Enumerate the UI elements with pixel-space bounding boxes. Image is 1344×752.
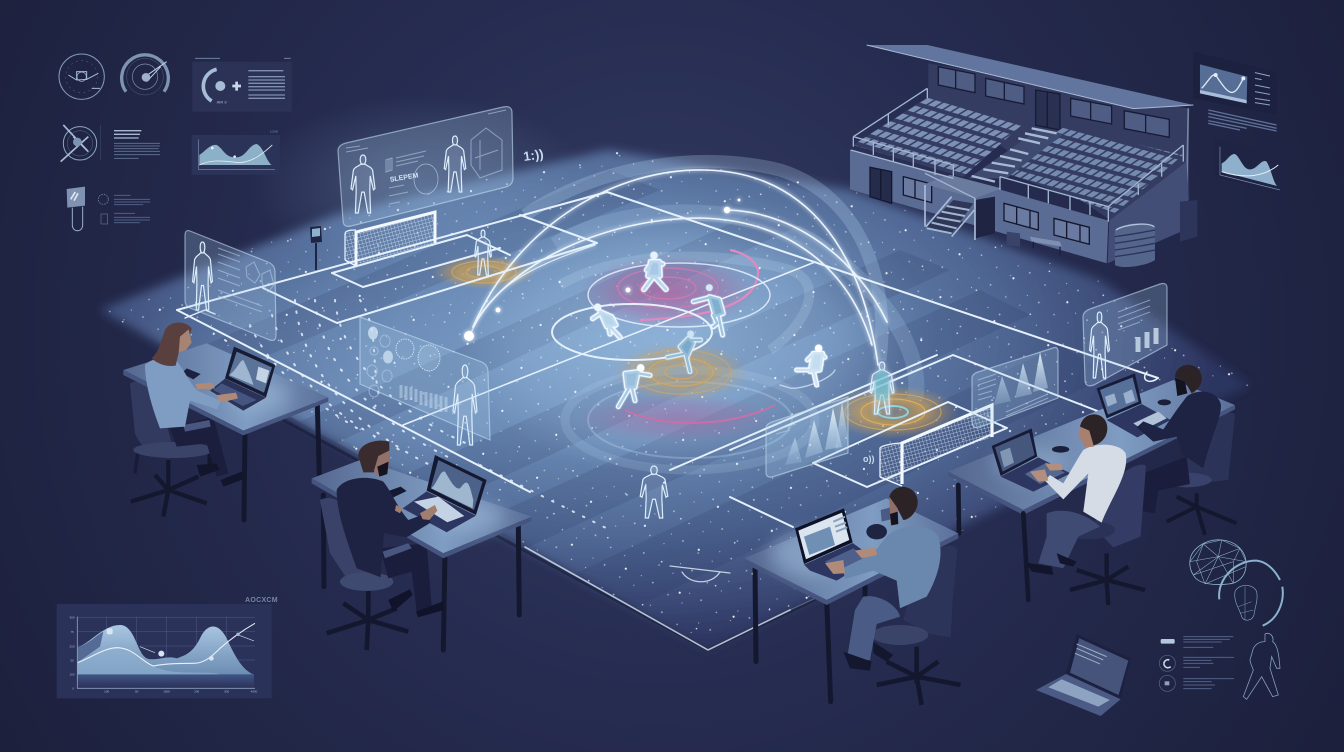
desk: analyst one [123,323,328,520]
far laptop [1097,373,1171,437]
panel: recovery dashboard card [192,58,292,112]
stand railings [851,88,1183,222]
far face [1175,377,1187,396]
player: striker [644,252,666,289]
clubhouse windows [938,67,1169,137]
camera tablet on pole [310,226,322,270]
chart axes [77,617,255,688]
middle torso [1045,445,1126,523]
woman torso [145,358,221,428]
small speaker box [881,507,895,522]
desk top [123,343,328,431]
underpass [975,197,995,238]
front laptop [795,508,874,581]
front legs [847,596,900,661]
sonar icon near goal: o)) [863,454,874,464]
holographic panel: biometric silhouette [185,231,276,340]
board readouts [346,110,506,204]
panel: anatomy wireframe [1159,540,1283,699]
man legs [380,543,432,616]
ring gauge [1219,561,1280,599]
player: sprinter [797,345,825,385]
man hair [358,441,389,472]
front chair [872,546,961,705]
chart labels: 75 [70,630,74,634]
heat zones [432,250,959,442]
middle face [1078,427,1094,447]
armrest [183,420,211,432]
panel: radar dial [59,54,104,99]
middle legs [1038,511,1100,568]
middle laptop [992,428,1071,492]
holographic panel: data clusters [360,317,490,445]
desk: analyst two [312,441,532,650]
board readouts: SLEPEM [389,172,419,184]
woman hands [195,383,238,402]
lower wall left [850,150,1108,263]
right goal [880,405,992,486]
pitch lines [177,192,1158,650]
panel: stadium chart top right [1193,52,1285,195]
bowl [866,524,887,539]
front beard [890,512,898,525]
holographic panel: load peaks [972,348,1058,428]
holographic panel: player tracking board [338,107,513,226]
central stairs [968,128,1063,178]
panel: wearable sensor legend [67,187,150,231]
chart grid [77,617,255,688]
signal icon: 1:)) [522,146,544,164]
middle hair [1080,414,1107,445]
middle hands [1030,463,1063,482]
player outline figures [475,230,668,518]
man chair [320,498,408,650]
bench and bin [1007,232,1062,255]
board figures [351,136,466,213]
woman hair [152,323,192,366]
left goal [345,212,435,266]
middle chair [1062,465,1146,605]
goalkeeper figure [870,362,894,414]
chart labels: 200 [70,644,75,648]
desk: analyst three [744,487,961,705]
far torso [1137,392,1221,468]
chart labels: 300 [224,690,229,694]
man beard [377,462,389,477]
player: midfielder tall [693,284,723,335]
far chair [1162,413,1237,535]
chart labels: 200 [194,690,199,694]
man face [374,451,389,476]
desk: analyst five far right [948,365,1237,605]
mesh skull [1235,585,1257,620]
chart labels: 0 [72,686,74,690]
chart markers [107,628,240,661]
stair treads [972,128,1057,182]
man laptop [403,455,487,532]
chart trend lines [77,623,255,666]
desk legs [210,405,319,520]
desk top [312,459,532,553]
holographic panel: squad stats [1083,284,1167,386]
ball trajectories [464,170,887,365]
far legs [1141,457,1190,513]
text strip [1208,110,1277,131]
woman legs [170,417,228,477]
seating bank left [853,97,1023,177]
desk legs [323,495,519,650]
legend text lines [1183,637,1234,689]
phone [387,487,407,497]
stand back wall [928,63,1189,220]
lower windows [870,167,1089,244]
lower wall right side [1108,162,1188,263]
front torso [843,527,941,608]
chart: performance curve bottom left [57,604,272,698]
player: crouching [593,304,620,337]
roof [867,45,1193,109]
man armrest [383,543,412,558]
side cabinet [1180,200,1197,242]
woman chair [130,381,213,517]
player: runner [667,331,701,372]
water tank [1115,223,1155,267]
chart labels: 300 [70,615,75,619]
man hand [395,505,437,520]
laptop on floor [1036,634,1131,716]
chart labels: 1000 [163,690,170,694]
seating bank right [1003,127,1183,213]
chart labels [70,615,258,694]
legend icons [1159,639,1175,691]
long desk [948,380,1235,510]
front face [889,497,898,525]
panel: small area chart: LOAD [270,129,279,133]
tracking dots [100,150,1250,650]
chart base band [77,674,254,688]
desk legs [958,485,1028,600]
chart areas [77,625,253,674]
stadium stand [850,45,1197,267]
desk legs [755,567,865,702]
analysis swirl bands [455,161,916,477]
player: defender [618,364,650,407]
runner outline [1243,633,1280,699]
metal staircase [925,185,975,240]
chart labels: 4000 [251,690,258,694]
far hair [1175,365,1202,393]
tablet on desk [182,368,201,379]
pitch floor [100,95,1250,650]
chart labels: 50 [135,690,139,694]
panel: gauge dial [122,55,168,95]
stair landing [925,175,1002,198]
lower chart panel [1215,138,1285,195]
man torso [337,478,431,577]
players on pitch [593,252,825,407]
chart labels: 100 [104,690,109,694]
chart title: AOCXCM [245,597,278,604]
desk top [744,498,958,600]
mesh head [1190,540,1246,585]
roof support [1187,108,1188,197]
holographic panel: goal heat peaks [766,397,849,477]
front hands [825,547,877,574]
chart labels: 50 [70,658,74,662]
front hair [889,487,918,520]
woman laptop [210,347,275,411]
panel: recovery dashboard card: AIR 9 [217,99,227,104]
panel: small area chart [192,129,280,175]
woman face [179,329,192,353]
chart labels: 100 [70,673,75,677]
panel: crosshair notes [61,125,160,162]
